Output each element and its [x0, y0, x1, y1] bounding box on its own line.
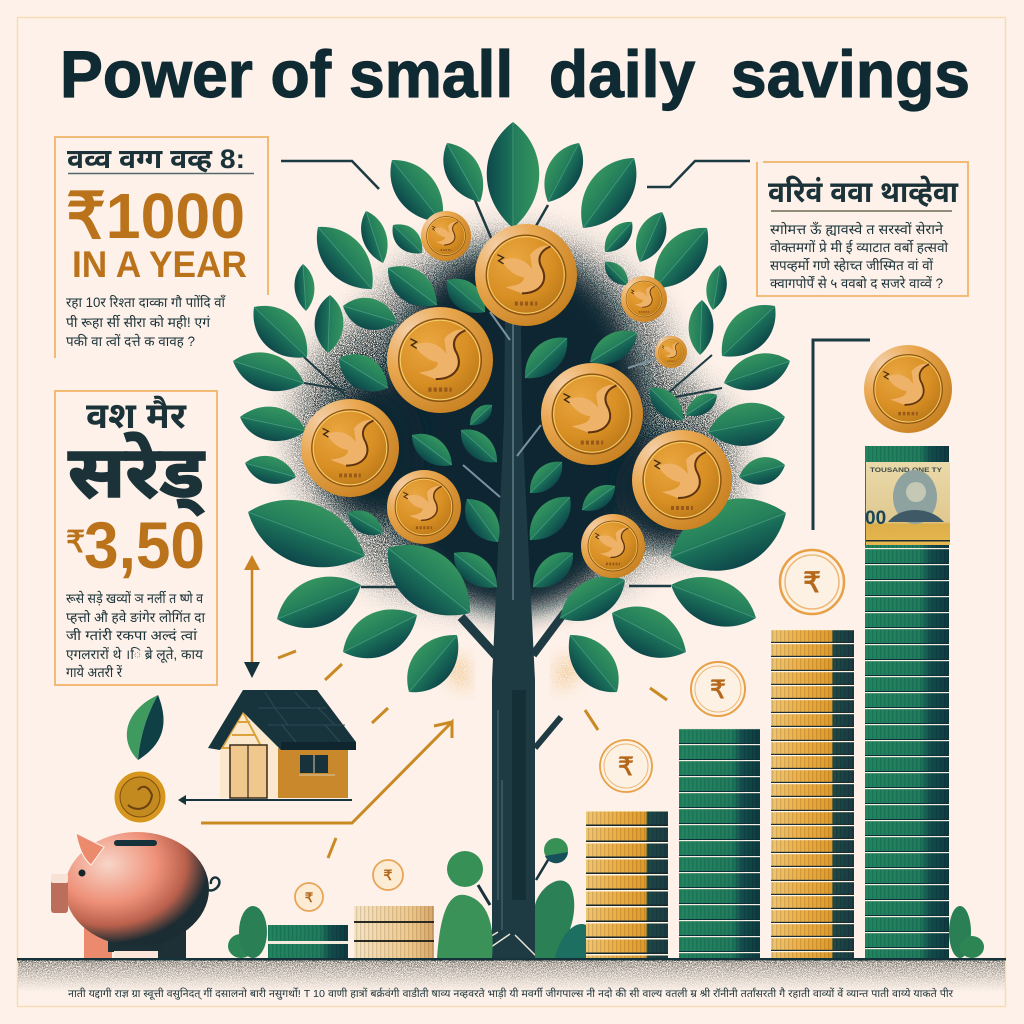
icon: gold coin above piggy bank: [114, 771, 166, 823]
stack 2: [354, 906, 434, 958]
coin 1: ₹: [305, 890, 314, 905]
coin 4: ₹: [710, 676, 726, 704]
box heading: वव्व वग्ग वव्ह 8:: [67, 144, 245, 174]
box description: गाये अतरी रें: [66, 663, 122, 680]
footer text: नाती यद्दागी राज्ञ ग्रा स्वूत्ती वसुनिदत् गीं दसालनो बारी नसुगर्थो! T 10 वाणी हात्रों बर्क्रवंगी वाडीती षाव्य नव्हवरते भाड़ी यी मवर्गी जीगपाल्स नी नदो की सी वाल्य वतली म्र श्री रॉनीनी तर्तांसरती गै रहाती वाव्यों वें व्यान्त पाती वाय्ये याकते पीर: [68, 987, 954, 1001]
ground arrow: [180, 799, 352, 801]
tree leaves: [228, 122, 798, 705]
box description: एगलरारों थे ।ि ब्रे लूते, काय: [66, 645, 204, 664]
stack 3: [586, 810, 668, 958]
box heading: वरिवं ववा थाव्हेवा: [768, 174, 959, 209]
stack 6: [865, 446, 950, 958]
banknote: [865, 462, 950, 545]
tree backdrop shadow: [295, 235, 737, 690]
icon: double arrow: [244, 555, 260, 678]
panel: yearly saving box: [55, 137, 268, 358]
coin 3: [600, 740, 652, 792]
coin 1: [295, 883, 323, 911]
box description: पकी वा त्वों दत्ते क वावह ?: [66, 332, 195, 349]
large word: सरेड्: [68, 432, 205, 517]
title: Power of small daily savings: [60, 37, 970, 111]
amount: 3,50: [84, 508, 205, 582]
panel: savings box: [55, 391, 217, 685]
banknote: TOUSAND ONE TY: [870, 467, 943, 474]
icon: falling leaf: [127, 695, 164, 760]
amount: ₹: [66, 526, 85, 559]
box description: क्वागपोर्पें से ५ ववबो द सजरे वाव्वें ?: [770, 274, 943, 291]
box description: सपव्हर्मो गणे स्हेाच्त जीस्मित वां वों: [770, 256, 933, 273]
growth arrow and dashes: [201, 651, 667, 858]
box description: वोक्तमगों प्रे मी ई व्याटात वर्बो हत्सवो: [770, 238, 949, 255]
panel: right box: [757, 162, 968, 296]
callout lines: [281, 161, 870, 530]
amount: ₹1000: [66, 180, 245, 252]
icon: piggy bank: [51, 832, 219, 958]
box description: स्गोमत्त ऊँ ह्यावस्वे त सरस्वों सेराने: [770, 220, 944, 237]
banknote: 00: [865, 508, 886, 529]
coin 5: [780, 550, 844, 614]
box description: [66, 589, 206, 680]
box heading: वश मैर: [86, 394, 187, 436]
ground: [17, 958, 1006, 992]
tree coins: [301, 211, 732, 578]
coin 2: ₹: [384, 867, 393, 883]
coin 4: [691, 662, 745, 716]
rupee coins above stacks: [295, 550, 844, 911]
ground bushes: [228, 838, 984, 958]
in a year: IN A YEAR: [72, 244, 247, 285]
box description: प्हत्तो औ हवे ङांगेर लोगिंत दा: [66, 608, 206, 625]
icon: house: [178, 690, 356, 805]
stack 1: [268, 925, 348, 958]
coin 3: ₹: [618, 753, 634, 781]
box description: रूसे सड़े खव्यों ञ नर्ली त ष्णे व: [66, 589, 203, 606]
coin 5: ₹: [803, 567, 821, 598]
coin 2: [373, 860, 403, 890]
box description: पी रूहा र्सी सीरा को मही! एगं: [66, 314, 210, 330]
large coin above tallest stack: [864, 345, 952, 433]
box description: जी ग्तांरी रकपा अल्दं त्वां: [66, 627, 198, 643]
box description: [66, 293, 226, 349]
box description: [770, 220, 949, 291]
stack 4: [679, 728, 760, 958]
box description: रहा 10र रिश्ता दाव्का गौ पाोंदि वाँ: [66, 293, 226, 310]
chart: coin stacks: [268, 446, 950, 958]
stack 5: [771, 629, 854, 958]
tree trunk and branches: [304, 200, 722, 958]
